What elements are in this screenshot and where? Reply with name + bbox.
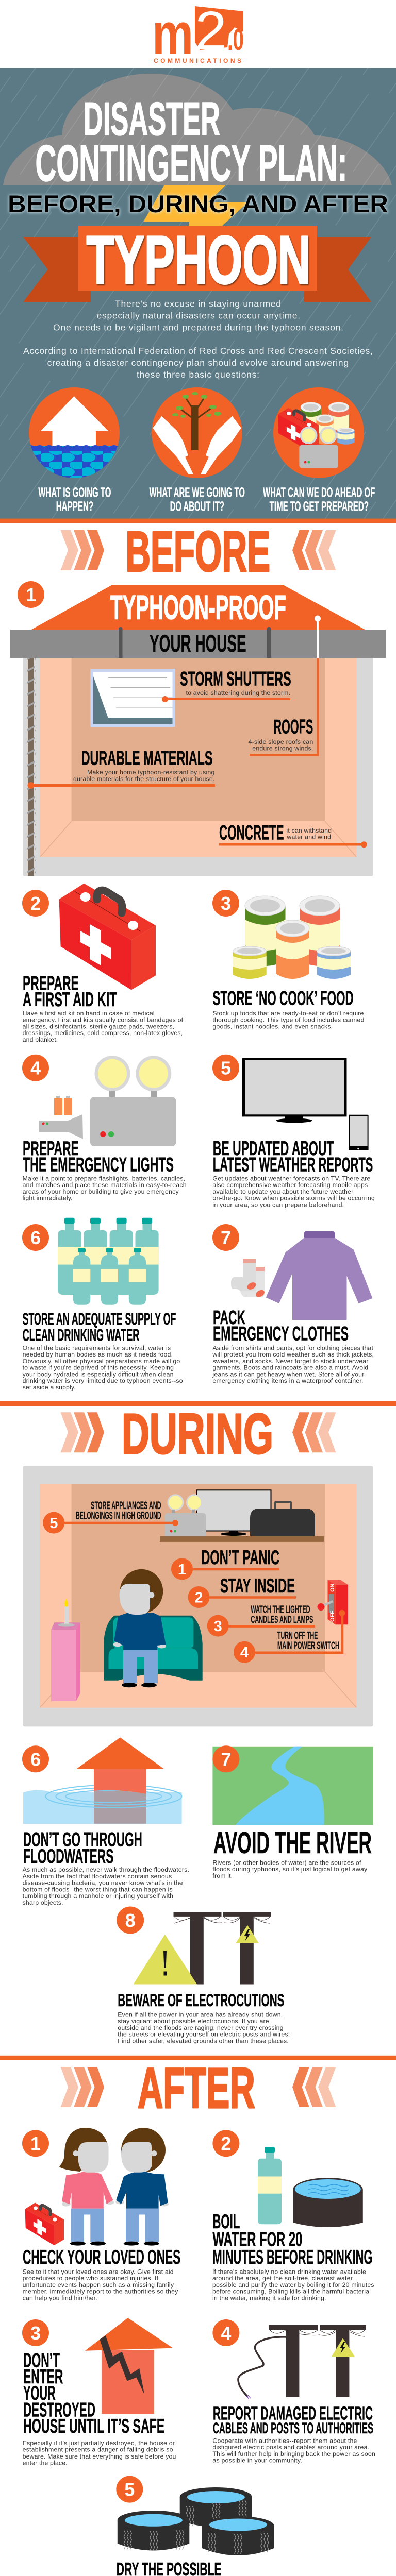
body text: and matches and place these materials in easy-to-reach: [23, 1181, 187, 1189]
body text: [23, 1344, 183, 1391]
heading: YOUR: [23, 2382, 56, 2404]
body text: procedures to people who sustained injuries. If: [23, 2275, 159, 2282]
item 5: weather reports: [212, 1055, 375, 1208]
number badge 5: 5: [124, 2479, 135, 2500]
number badge 2: [22, 890, 49, 917]
heading: [23, 972, 117, 1011]
step 5: store appliances: STORE APPLIANCES AND: [91, 1500, 161, 1512]
heading: DESTROYED: [23, 2399, 95, 2421]
after item 4: report damage: [212, 2319, 375, 2464]
callout: roofs: 4-side slope roofs can: [249, 738, 313, 745]
heading: after: [61, 2057, 336, 2120]
figure: person sitting: [113, 1569, 166, 1687]
logo: m2.0 communications: [152, 1, 244, 66]
callout: concrete: CONCRETE: [219, 821, 284, 844]
number badge 5: [212, 1055, 239, 1081]
icon: window: [90, 669, 175, 727]
body text: [23, 1175, 187, 1202]
body text: jeans as it can get heavy when wet. Store all of your: [212, 1370, 364, 1378]
body text: dressings, medicines, cold compress, non-latex gloves,: [23, 1029, 183, 1037]
step 2: stay inside: STAY INSIDE: [220, 1575, 295, 1597]
step 3: watch candles: 3: [214, 1618, 222, 1635]
number badge 2: 2: [30, 893, 41, 914]
heading: PREPARE: [23, 1138, 79, 1160]
body text: One of the basic requirements for survival, water is: [23, 1344, 171, 1351]
body text: [212, 2268, 374, 2301]
body text: Even if all the power in your area has already shut down,: [118, 2011, 283, 2018]
item 2: first aid kit: [22, 884, 184, 1043]
step 5: store appliances: BELONGINGS IN HIGH GROUND: [76, 1510, 161, 1522]
heading: [212, 2211, 372, 2268]
panel: during room scene: [23, 1466, 373, 1726]
step 1: don't panic: [171, 1547, 279, 1580]
heading: ENTER: [23, 2366, 63, 2388]
question 2: DO ABOUT IT?: [170, 498, 224, 514]
body text: [212, 1344, 374, 1384]
body text: can help you find him/her.: [23, 2294, 97, 2301]
body text: This will further help in bringing back the power as soon: [212, 2450, 375, 2458]
body text: member, immediately report to the authorities so they: [23, 2287, 178, 2295]
step 4: main power switch: 4: [240, 1645, 249, 1661]
heading: PACK: [213, 1307, 245, 1329]
body text: Find other safer, elevated grounds other than these places.: [118, 2037, 289, 2044]
icon: storm cloud: [3, 74, 392, 185]
body text: disfigured electric posts and cables around your area.: [212, 2444, 369, 2451]
body text: disease-causing bacteria, you never know what’s in the: [23, 1879, 183, 1887]
shelf with belongings: [160, 1489, 324, 1542]
number badge 4: 4: [221, 2323, 231, 2344]
question 2: [150, 484, 245, 514]
icon: river: [212, 1747, 373, 1825]
icon: couch: [104, 1616, 203, 1681]
heading: HOUSE UNTIL IT’S SAFE: [23, 2415, 164, 2437]
item 4: emergency lights: [22, 1055, 187, 1202]
callout: storm shutters: to avoid shattering during the storm.: [186, 689, 290, 697]
text block: introduction: especially natural disasters can occur anytime.: [97, 310, 300, 320]
number badge 2: 2: [221, 2133, 231, 2154]
body text: [212, 1010, 364, 1030]
body text: drinking water is very limited due to typhoon events--so: [23, 1377, 183, 1384]
step 4: main power switch: MAIN POWER SWITCH: [277, 1640, 339, 1651]
step 1: don't panic: DON’T PANIC: [201, 1547, 279, 1569]
number badge 6: 6: [30, 1749, 41, 1770]
icon: hands holding tree: [152, 387, 242, 478]
icon: water-filled tires: [118, 2487, 274, 2555]
heading: CLEAN DRINKING WATER: [23, 1326, 139, 1345]
body text: also comprehensive weather forecasting mobile apps: [212, 1181, 368, 1189]
logo: m2.0 communications: COMMUNICATIONS: [154, 57, 241, 64]
body text: needed by human bodies as much as it needs food.: [23, 1351, 173, 1358]
question 1: [38, 484, 111, 514]
body text: enter the place.: [23, 2460, 68, 2467]
heading: FLOODWATERS: [23, 1845, 113, 1868]
number badge 1: 1: [30, 2133, 41, 2154]
number badge 3: 3: [221, 893, 231, 914]
heading: [213, 2402, 373, 2437]
body text: emergency. First aid kits usually consist of bandages of: [23, 1016, 184, 1024]
heading: [23, 1829, 142, 1868]
body text: and blanket.: [23, 1036, 58, 1043]
heading: STORE AN ADEQUATE SUPPLY OF: [23, 1310, 176, 1328]
body text: goods, instant noodles, and even snacks.: [212, 1023, 333, 1030]
house walls: [23, 658, 373, 876]
body text: Cooperate with authorities--report them about the: [212, 2437, 357, 2444]
icon: couple and first aid kit: [25, 2128, 169, 2246]
panel: typhoon-proof house: [10, 581, 386, 876]
body text: [212, 2437, 375, 2464]
icon: rebar: [27, 658, 36, 876]
item 6: floodwaters: [22, 1737, 189, 1906]
body text: set aside a supply.: [23, 1384, 76, 1391]
body text: As much as possible, never walk through the floodwaters.: [23, 1866, 189, 1873]
icon: water bottles: [58, 1218, 159, 1305]
body text: beware. Make sure that everything is safe before you: [23, 2453, 176, 2460]
heading: after: AFTER: [138, 2057, 255, 2120]
callout: roofs: ROOFS: [273, 716, 313, 738]
text block: introduction: [23, 298, 373, 380]
icon: power switch: OFF: [329, 1611, 336, 1622]
number badge 1: 1: [26, 584, 36, 605]
body text: in the water, making it safe for drinking.: [212, 2294, 326, 2301]
body text: as possible in your community.: [212, 2457, 302, 2464]
body text: emergency clothing items in a waterproof container.: [212, 1377, 363, 1384]
logo: m2.0 communications: m: [152, 2, 193, 66]
callout: durable materials: DURABLE MATERIALS: [81, 748, 212, 770]
heading: before: [61, 520, 336, 584]
body text: all sizes, disinfectants, sterile gauze pads, tweezers,: [23, 1023, 174, 1030]
heading: DON’T GO THROUGH: [23, 1829, 142, 1851]
number badge 4: 4: [30, 1058, 41, 1079]
heading: disaster contingency plan: DISASTER: [84, 93, 220, 145]
question 3: [263, 484, 375, 514]
body text: If there’s absolutely no clean drinking water available: [212, 2268, 366, 2275]
icon: flooded house: [23, 1737, 182, 1824]
body text: sweaters, and socks. Never forget to stock underwear: [212, 1358, 368, 1365]
heading: [23, 2349, 164, 2437]
step 4: main power switch: TURN OFF THE: [277, 1630, 318, 1641]
body text: in your area, so you can prepare beforehand.: [212, 1201, 344, 1208]
text block: introduction: According to International Federation of Red Cross and Red Crescent Societies,: [23, 346, 373, 356]
number badge 8: 8: [125, 1910, 136, 1931]
text block: introduction: One needs to be vigilant and prepared during the typhoon season.: [53, 322, 343, 332]
body text: possible and purify the water by boiling it for 20 minutes: [212, 2281, 374, 2289]
question 1: WHAT IS GOING TO: [38, 484, 111, 500]
step 3: watch candles: [207, 1604, 315, 1637]
body text: [118, 2011, 290, 2044]
after item 2: boil water: [212, 2130, 374, 2301]
step 4: main power switch: [234, 1610, 345, 1663]
icon: emergency lights and flashlight: [39, 1056, 176, 1146]
step 3: watch candles: WATCH THE LIGHTED: [251, 1604, 310, 1616]
icon: bottle and pot: [258, 2147, 363, 2227]
callout: concrete: water and wind: [286, 833, 331, 840]
heading: BOIL: [212, 2211, 240, 2233]
body text: garments. Boots and raincoats are also a must. Avoid: [212, 1364, 368, 1371]
body text: tumbling through a manhole or injuring yourself with: [23, 1892, 173, 1900]
callout: roofs: endure strong winds.: [252, 745, 313, 752]
body text: the streets or elevating yourself on electric posts and wires!: [118, 2031, 290, 2038]
icon: flooded house: [29, 387, 120, 478]
callout: durable materials: Make your home typhoon-resistant by using: [87, 769, 214, 776]
heading: BEWARE OF ELECTROCUTIONS: [118, 1991, 284, 2010]
body text: Aside from shirts and pants, opt for clothing pieces that: [212, 1344, 373, 1351]
heading: during: DURING: [122, 1402, 273, 1466]
item 3: no cook food: [212, 890, 364, 1030]
heading: disaster contingency plan: [35, 93, 348, 192]
body text: available to update you about the future weather: [212, 1188, 353, 1195]
number badge 7: 7: [221, 1227, 231, 1248]
question 1: HAPPEN?: [56, 498, 93, 514]
item 6: drinking water: [22, 1218, 183, 1391]
body text: unfortunate events happen such as a missing family: [23, 2281, 174, 2289]
number badge 2: [212, 2130, 239, 2157]
body text: establishment presents a danger of falling debris so: [23, 2446, 173, 2453]
number badge 3: 3: [30, 2323, 41, 2344]
number badge 7: 7: [221, 1749, 231, 1770]
number badge 6: [22, 1224, 49, 1251]
number badge 6: 6: [30, 1227, 41, 1248]
step 2: stay inside: [188, 1575, 296, 1608]
step 5: store appliances: 5: [50, 1515, 58, 1532]
number badge 7: [212, 1745, 239, 1772]
number badge 3: [22, 2319, 49, 2346]
body text: [212, 1175, 375, 1208]
body text: stay vigilant about possible electrocutions. If you are: [118, 2018, 269, 2025]
heading: [23, 1310, 176, 1345]
body text: [212, 1859, 368, 1879]
icon: television and phone: [242, 1058, 369, 1150]
logo: m2.0 communications: .0: [227, 23, 244, 57]
callout: concrete: it can withstand: [286, 827, 332, 834]
heading: DON’T: [23, 2349, 60, 2371]
body text: your body hydrated is especially difficult when clean: [23, 1370, 174, 1378]
body text: will protect you from cold weather such as thick jackets,: [212, 1351, 374, 1358]
item 8: electrocutions: [117, 1906, 290, 2044]
number badge 8: [117, 1906, 144, 1934]
number badge 7: [212, 1224, 239, 1251]
body text: Aside from the fact that floodwaters contain serious: [23, 1873, 172, 1880]
body text: sharp objects.: [23, 1899, 63, 1906]
number badge 6: [22, 1745, 49, 1772]
callout: durable materials: [28, 748, 215, 789]
callout: durable materials: durable materials for the structure of your house.: [73, 775, 214, 783]
body text: from it.: [212, 1872, 233, 1879]
step 3: watch candles: CANDLES AND LAMPS: [251, 1614, 313, 1625]
callout: storm shutters: STORM SHUTTERS: [180, 668, 291, 690]
icon: first aid kit: [59, 884, 156, 990]
body text: Stock up foods that are ready-to-eat or don’t require: [212, 1010, 364, 1017]
number badge 1: [18, 581, 44, 608]
body text: bottom of floods--the worst thing that can happen is: [23, 1886, 173, 1893]
body text: Get updates about weather forecasts on TV. There are: [212, 1175, 371, 1182]
heading: WATER FOR 20: [212, 2229, 302, 2251]
after item 3: destroyed house: [22, 2318, 176, 2467]
body text: Especially if it’s just partially destroyed, the house or: [23, 2439, 175, 2447]
body text: around the area, get the soil-free, clearest water: [212, 2275, 353, 2282]
callout: concrete: [219, 821, 367, 848]
band: your house: [10, 627, 386, 662]
number badge 3: [212, 890, 239, 917]
step 1: don't panic: 1: [178, 1562, 186, 1578]
body text: Make it a point to prepare flashlights, batteries, candles,: [23, 1175, 185, 1182]
text block: introduction: these three basic questions:: [137, 369, 259, 380]
heading: [23, 1138, 174, 1176]
body text: [23, 1866, 189, 1906]
panel: title header: [0, 68, 396, 519]
callout: roofs: [249, 658, 318, 755]
question 2: WHAT ARE WE GOING TO: [150, 484, 245, 500]
number badge 1: [22, 2130, 49, 2157]
band: your house: YOUR HOUSE: [150, 630, 246, 657]
white roof leader: [315, 615, 321, 658]
step 5: store appliances: [43, 1500, 178, 1534]
text block: introduction: creating a disaster contingency plan should evolve around answering: [47, 358, 349, 368]
heading: [213, 1307, 349, 1345]
heading: PREPARE: [23, 972, 79, 994]
number badge 4: [212, 2319, 239, 2346]
heading: CHECK YOUR LOVED ONES: [23, 2246, 180, 2268]
after item 1: loved ones: [22, 2128, 180, 2301]
body text: outside and the floods are raging, never ever try crossing: [118, 2024, 284, 2031]
heading: before, during, and after: BEFORE, DURING, AND AFTER: [8, 190, 388, 217]
body text: Have a first aid kit on hand in case of medical: [23, 1010, 155, 1017]
icon: canned goods: [233, 896, 351, 979]
item 7: emergency clothes: [212, 1224, 374, 1384]
callout: storm shutters: [162, 668, 291, 702]
icon: damaged electric post: [238, 2325, 366, 2399]
icon: cracked house: [85, 2318, 173, 2414]
body text: to waste if you’re deprived of this necessity. Keeping: [23, 1364, 174, 1371]
icon: lightning bolt: [143, 185, 249, 226]
icon: sweater and socks: [231, 1231, 372, 1320]
body text: [23, 2439, 176, 2467]
body text: before consuming. Boiling kills all the harmful bacteria: [212, 2287, 369, 2295]
after item 5: mosquito breeding: [116, 2476, 274, 2576]
body text: on-the-go. Know when possible storms will be occurring: [212, 1195, 375, 1202]
body text: See to it that your loved ones are okay. Give first aid: [23, 2268, 174, 2275]
logo: m2.0 communications: 2: [195, 1, 227, 61]
body text: [23, 2268, 178, 2301]
body text: Rivers (or other bodies of water) are the sources of: [212, 1859, 361, 1866]
icon: electric posts and warning signs: [134, 1912, 271, 1985]
step 2: stay inside: 2: [194, 1590, 203, 1606]
body text: thorough cooking. This type of food includes canned: [212, 1016, 364, 1024]
item 7: avoid the river: [212, 1745, 373, 1879]
number badge 5: 5: [221, 1058, 231, 1079]
heading: THE EMERGENCY LIGHTS: [23, 1154, 174, 1176]
text block: introduction: There’s no excuse in staying unarmed: [115, 298, 281, 309]
body text: [23, 1010, 184, 1043]
icon: power switch: ON: [329, 1583, 336, 1592]
heading: before: BEFORE: [125, 520, 270, 584]
body text: areas of your home or building to give you emergency: [23, 1188, 179, 1195]
roof: [31, 585, 365, 630]
heading: A FIRST AID KIT: [23, 989, 117, 1011]
body text: Obviously, all other physical preparations made will go: [23, 1358, 180, 1365]
icon: power switch: [318, 1580, 348, 1624]
number badge 5: [116, 2476, 143, 2503]
icon: candle on table: [51, 1599, 80, 1701]
body text: light immediately.: [23, 1195, 73, 1202]
body text: floods during typhoons, so it’s just logical to get away: [212, 1866, 368, 1873]
heading: [213, 1138, 373, 1176]
number badge 4: [22, 1055, 49, 1081]
icon: emergency supplies: [273, 387, 364, 478]
